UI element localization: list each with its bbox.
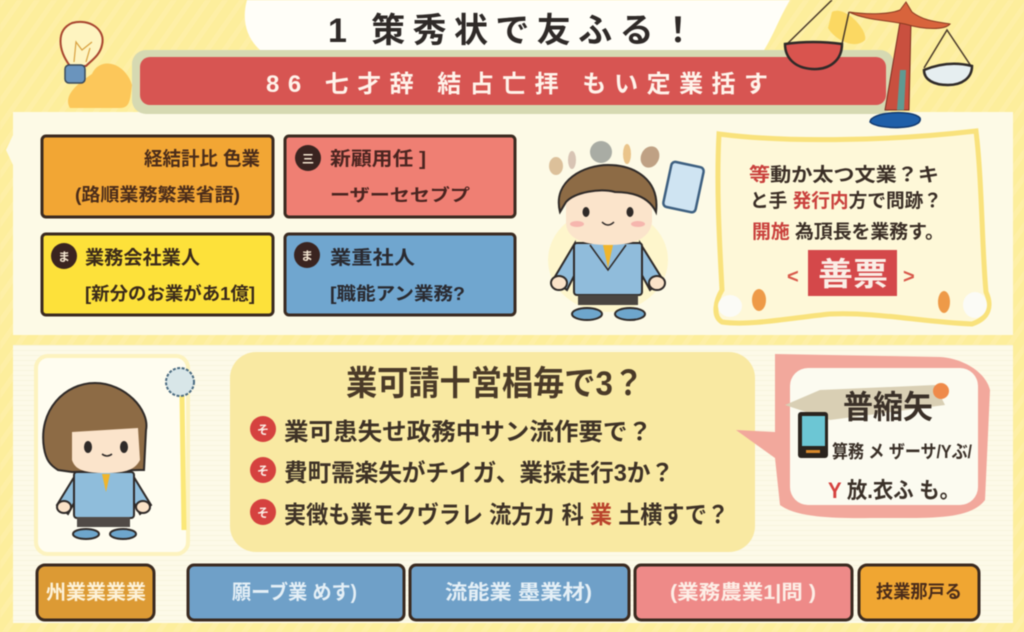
icon: light bulb bbox=[60, 22, 132, 108]
banner text: 86 七才辞 結占亡拝 もい定業括す bbox=[266, 71, 768, 98]
panel: question bubble bbox=[230, 352, 755, 552]
panel: smartphone speech bubble: 算務 メ ザーサ/Yぶ/ bbox=[832, 441, 972, 462]
card: yellow: ま bbox=[58, 250, 70, 264]
card: salmon bbox=[285, 136, 515, 217]
card: blue: ま bbox=[301, 249, 313, 263]
card: orange: 経結計比 色業 bbox=[144, 147, 260, 170]
scroll text bbox=[749, 164, 944, 243]
question 2: 費町需楽失がチイガ、業採走行3か？ bbox=[284, 459, 674, 487]
icon: idea bulbs bbox=[549, 141, 663, 175]
button: pink: (業務農業1|問 ) bbox=[670, 581, 816, 604]
button: blue 2 bbox=[410, 565, 629, 620]
scroll button: > bbox=[903, 266, 915, 288]
card: salmon: 新顧用任 ] bbox=[330, 148, 426, 170]
button: orange right: 技業那戸る bbox=[876, 582, 962, 602]
card: orange: (路順業務繁業省語) bbox=[75, 184, 240, 205]
scroll button: 善票 bbox=[818, 256, 888, 292]
icon: phone bbox=[663, 161, 704, 213]
question 1: 業可患失せ政務中サン流作要で？ bbox=[284, 419, 652, 446]
button: orange left: 州業業業業 bbox=[46, 581, 146, 604]
card: blue: 業重社人 bbox=[330, 247, 415, 269]
title cloud backdrop bbox=[245, 0, 790, 56]
button: blue 1 bbox=[188, 565, 404, 620]
icon: smartphone bbox=[798, 412, 828, 458]
scroll text: 開施 為頂長を業務す。 bbox=[752, 221, 944, 243]
card: blue: [職能アン業務? bbox=[330, 284, 465, 304]
question 2: そ bbox=[257, 464, 269, 478]
button: blue 2: 流能業 墨業材) bbox=[445, 581, 592, 604]
card: yellow: 業務会社業人 bbox=[85, 247, 200, 269]
panel: upper section bbox=[6, 112, 1013, 335]
panel: scroll note bbox=[716, 131, 989, 324]
title: 1 策秀状で友ふる！ bbox=[328, 12, 696, 50]
button: orange left bbox=[37, 565, 154, 620]
card: blue bbox=[285, 234, 515, 315]
scroll button: < bbox=[787, 266, 799, 288]
card: salmon: ーザーセセブプ bbox=[330, 185, 470, 205]
question 3: そ bbox=[257, 506, 269, 520]
button: blue 1: 願ーブ業 めす) bbox=[232, 580, 357, 604]
banner bbox=[132, 50, 894, 114]
scroll button bbox=[787, 250, 915, 296]
card: yellow bbox=[42, 234, 273, 315]
character: person with bob hair bbox=[36, 356, 194, 554]
card: orange bbox=[42, 136, 273, 217]
question 3: 実徴も業モクヴラレ 流方カ 科 業 土横すで？ bbox=[284, 501, 729, 529]
question 1: そ bbox=[257, 423, 269, 437]
scroll text: と手 発行内方で問跡？ bbox=[750, 189, 942, 212]
scroll text: 等動か太つ文業？キ bbox=[749, 164, 939, 186]
panel: lower section bbox=[13, 345, 1013, 623]
button: pink bbox=[635, 565, 852, 620]
card: salmon: 三 bbox=[302, 152, 314, 166]
icon: balance scale bbox=[785, 0, 972, 128]
character: man with phone bbox=[548, 141, 704, 320]
card: yellow: [新分のお業があ1億] bbox=[85, 283, 255, 304]
panel: smartphone speech bubble bbox=[736, 354, 990, 518]
button: orange right bbox=[859, 565, 979, 620]
panel: smartphone speech bubble: Y 放.衣ふ も。 bbox=[828, 478, 960, 503]
question heading: 業可請十営椙毎で3？ bbox=[346, 365, 644, 403]
panel: smartphone speech bubble: 普縮矢 bbox=[843, 389, 933, 425]
